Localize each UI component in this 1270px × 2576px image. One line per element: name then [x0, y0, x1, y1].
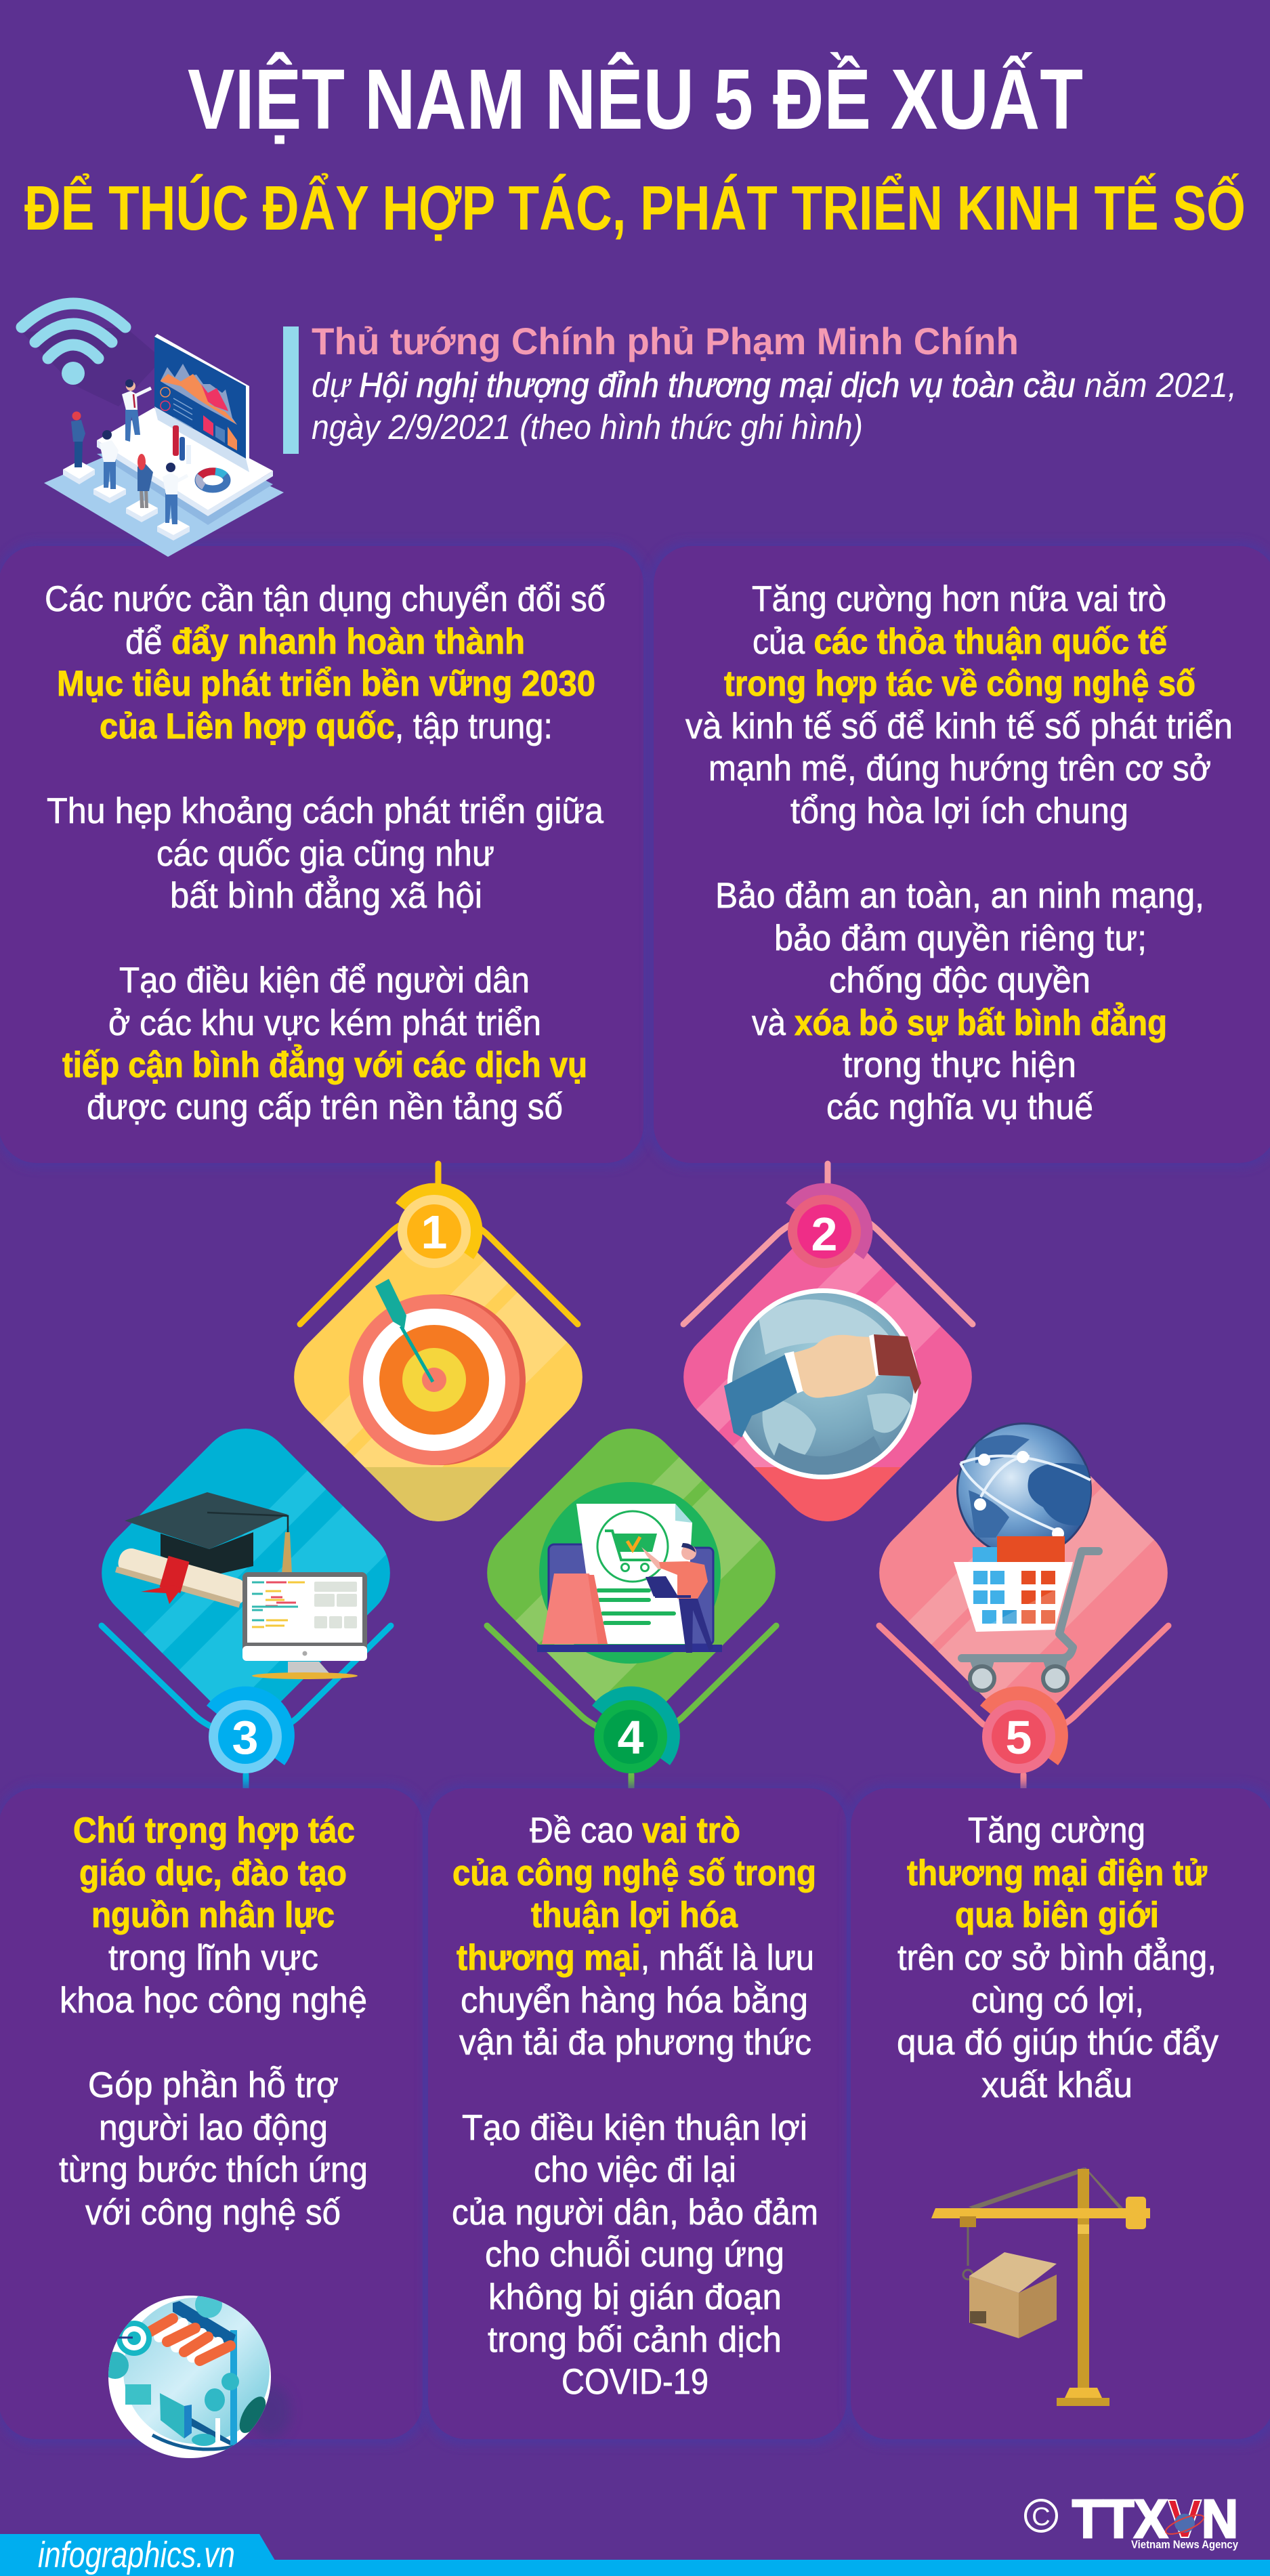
text: proposal 4 body: thuận lợi hóa	[531, 1895, 738, 1935]
footer band	[0, 2534, 1270, 2576]
text: upper right body: của các thỏa thuận quốc tế	[753, 622, 1167, 662]
text: proposal 5 body	[897, 1811, 1219, 2105]
proposal 3 diamond: education	[99, 1429, 394, 1788]
text: proposal 5 body: xuất khẩu	[981, 2065, 1133, 2105]
badge 3	[207, 1687, 295, 1773]
connector lines	[102, 1626, 391, 1790]
text: proposal 4 body: Đề cao vai trò	[530, 1811, 740, 1851]
bars	[173, 425, 191, 464]
text: proposal 3 body: khoa học công nghệ	[60, 1981, 367, 2021]
icon: order document, shopping bag and person	[537, 1482, 722, 1664]
title: line 1: VIỆT NAM NÊU 5 ĐỀ XUẤT	[188, 51, 1083, 147]
subtitle heading: Thủ tướng Chính phủ Phạm Minh Chính	[312, 320, 1019, 362]
text: proposal 5 body: thương mại điện tử	[907, 1853, 1208, 1893]
text: upper left body: Thu hẹp khoảng cách phát triển giữa	[47, 791, 604, 831]
text: upper right body: bảo đảm quyền riêng tư;	[774, 919, 1147, 958]
text: upper right body: Bảo đảm an toàn, an ninh mạng,	[715, 876, 1204, 916]
subtitle accent bar	[283, 326, 299, 454]
text: upper right body	[685, 579, 1233, 1127]
text: upper left body	[45, 579, 606, 1127]
connector lines	[487, 1626, 776, 1790]
text: upper left body: của Liên hợp quốc, tập trung:	[100, 706, 553, 746]
text: proposal 4 body: cho việc đi lại	[534, 2150, 736, 2190]
text: proposal 3 body: Góp phần hỗ trợ	[88, 2065, 339, 2105]
panel: proposal 3 text	[0, 1784, 427, 2445]
proposal 1 diamond: target	[294, 1161, 583, 1521]
badge 4	[592, 1687, 680, 1773]
illustration: isometric data platform with people	[44, 334, 284, 557]
text: proposal 5 body: trên cơ sở bình đẳng,	[897, 1937, 1216, 1978]
people	[71, 379, 188, 524]
text: upper left body: được cung cấp trên nền tảng số	[87, 1087, 563, 1127]
logo: copyright TTXVN: C	[1032, 2503, 1051, 2531]
text: proposal 3 body: trong lĩnh vực	[108, 1938, 318, 1978]
logo: copyright TTXVN: TTXVN	[1072, 2489, 1238, 2549]
proposal 5 diamond: globe and shopping cart	[876, 1422, 1172, 1788]
text: upper left body: Các nước cần tận dụng chuyển đổi số	[45, 579, 606, 619]
badge 1: 1	[421, 1206, 447, 1259]
text: upper left body: Tạo điều kiện để người dân	[119, 960, 530, 1000]
text: upper right body: Tăng cường hơn nữa vai trò	[752, 579, 1166, 619]
proposal 4 diamond: e-commerce document	[484, 1429, 779, 1788]
icon: shopping cart	[954, 1536, 1099, 1691]
proposal 2 diamond: global handshake	[680, 1161, 975, 1521]
connector lines	[683, 1164, 973, 1324]
badge 4: 4	[618, 1711, 644, 1764]
subtitle text block: dự Hội nghị thượng đỉnh thương mại dịch vụ toàn cầu năm 2021,	[312, 366, 1237, 404]
panel: proposal 5 text	[847, 1784, 1270, 2445]
text: proposal 4 body: chuyển hàng hóa bằng	[461, 1981, 808, 2021]
text: proposal 5 body: qua biên giới	[955, 1895, 1159, 1935]
badge 3: 3	[232, 1711, 258, 1764]
text: proposal 4 body: vận tải đa phương thức	[459, 2023, 811, 2063]
text: upper right body: và kinh tế số để kinh tế số phát triển	[685, 706, 1233, 746]
text: proposal 3 body: giáo dục, đào tạo	[79, 1853, 347, 1893]
text: proposal 4 body: không bị gián đoạn	[488, 2277, 782, 2317]
icon: crane lifting a box	[931, 2168, 1150, 2406]
footer site name: infographics.vn	[38, 2535, 235, 2575]
badge 2	[786, 1183, 872, 1268]
text: proposal 5 body: cùng có lợi,	[971, 1981, 1144, 2021]
badge 1	[396, 1183, 482, 1268]
text: proposal 4 body	[452, 1811, 818, 2402]
text: proposal 3 body: nguồn nhân lực	[91, 1895, 335, 1935]
donut chart	[198, 471, 227, 489]
icon: globe and handshake	[724, 1288, 921, 1480]
icon: target with dart	[349, 1279, 526, 1465]
text: proposal 5 body: Tăng cường	[968, 1811, 1145, 1851]
text: upper right body: trong thực hiện	[843, 1045, 1076, 1085]
icon: network globe	[956, 1422, 1092, 1558]
text: upper right body: tổng hòa lợi ích chung	[790, 791, 1128, 831]
text: upper left body: để đẩy nhanh hoàn thành	[125, 622, 525, 662]
panel: proposal 4 text	[424, 1784, 851, 2445]
text: proposal 4 body: của công nghệ số trong	[452, 1853, 816, 1893]
connector lines	[879, 1626, 1168, 1790]
text: upper right body: mạnh mẽ, đúng hướng trên cơ sở	[708, 748, 1211, 788]
text: proposal 4 body: của người dân, bảo đảm	[452, 2193, 818, 2233]
icon: wifi signal	[22, 303, 163, 406]
icon: graduation cap, diploma and computer	[114, 1492, 367, 1679]
text: upper left body: bất bình đẳng xã hội	[170, 875, 482, 916]
text: proposal 3 body: từng bước thích ứng	[59, 2150, 368, 2190]
panel: upper right	[649, 542, 1270, 1168]
text: proposal 4 body: trong bối cảnh dịch	[488, 2320, 782, 2360]
text: upper right body: trong hợp tác về công nghệ số	[724, 664, 1195, 704]
text: proposal 4 body: Tạo điều kiện thuận lợi	[462, 2108, 807, 2148]
text: proposal 4 body: COVID-19	[562, 2362, 708, 2402]
monitor with charts	[154, 334, 249, 472]
text: proposal 4 body: cho chuỗi cung ứng	[485, 2235, 784, 2275]
text: proposal 3 body: với công nghệ số	[85, 2193, 341, 2233]
badge 2: 2	[811, 1208, 837, 1261]
text: upper left body: Mục tiêu phát triển bền vững 2030	[57, 664, 595, 704]
subtitle text block: ngày 2/9/2021 (theo hình thức ghi hình)	[312, 408, 863, 446]
badge 5	[980, 1687, 1068, 1773]
connector lines	[300, 1164, 578, 1324]
text: proposal 3 body	[59, 1811, 368, 2233]
text: upper left body: tiếp cận bình đẳng với các dịch vụ	[62, 1044, 587, 1085]
text: proposal 3 body: Chú trọng hợp tác	[73, 1811, 355, 1851]
logo: copyright TTXVN: Vietnam News Agency	[1131, 2538, 1238, 2551]
text: proposal 5 body: qua đó giúp thúc đẩy	[897, 2023, 1219, 2063]
text: upper right body: các nghĩa vụ thuế	[826, 1087, 1093, 1127]
text: upper left body: các quốc gia cũng như	[156, 834, 494, 874]
pedestals	[63, 461, 190, 541]
text: proposal 3 body: người lao động	[99, 2108, 328, 2148]
text: proposal 4 body: thương mại, nhất là lưu	[457, 1938, 814, 1978]
text: upper left body: ở các khu vực kém phát triển	[108, 1003, 541, 1043]
badge 5: 5	[1006, 1711, 1032, 1764]
panel: upper left	[0, 542, 648, 1168]
text: upper right body: chống độc quyền	[829, 960, 1091, 1000]
text: upper right body: và xóa bỏ sự bất bình đẳng	[752, 1002, 1167, 1043]
subtitle text block	[312, 366, 1237, 446]
icon: online shop circle illustration	[102, 2291, 291, 2458]
